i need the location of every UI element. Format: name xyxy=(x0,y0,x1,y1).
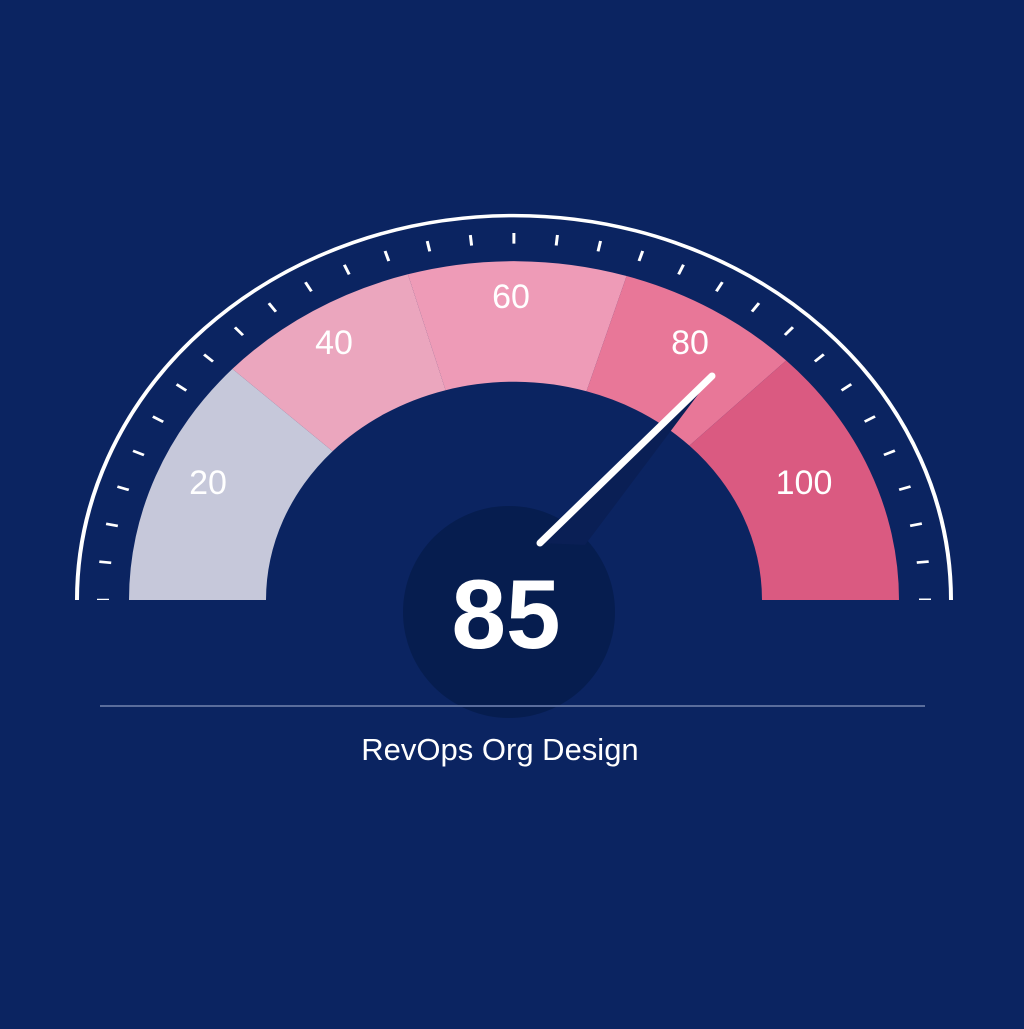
scale labels: 60 xyxy=(492,278,530,316)
gauge arcs xyxy=(77,216,951,600)
tick marks xyxy=(103,238,925,600)
needle xyxy=(540,376,712,545)
outer white arc xyxy=(77,216,951,600)
scale labels: 100 xyxy=(776,464,832,502)
segment: 0-20 gray xyxy=(129,369,333,600)
scale labels xyxy=(189,278,832,502)
divider xyxy=(100,705,925,707)
segment: 60 xyxy=(408,261,627,391)
title: RevOps Org Design xyxy=(361,732,639,767)
value: 85 xyxy=(451,559,561,669)
segment: 100 xyxy=(689,360,899,600)
scale labels: 80 xyxy=(671,324,709,362)
scale labels: 20 xyxy=(189,464,227,502)
segment: 40 xyxy=(232,274,446,451)
scale labels: 40 xyxy=(315,324,353,362)
segment: 80 xyxy=(586,276,786,446)
center hub xyxy=(403,506,615,718)
